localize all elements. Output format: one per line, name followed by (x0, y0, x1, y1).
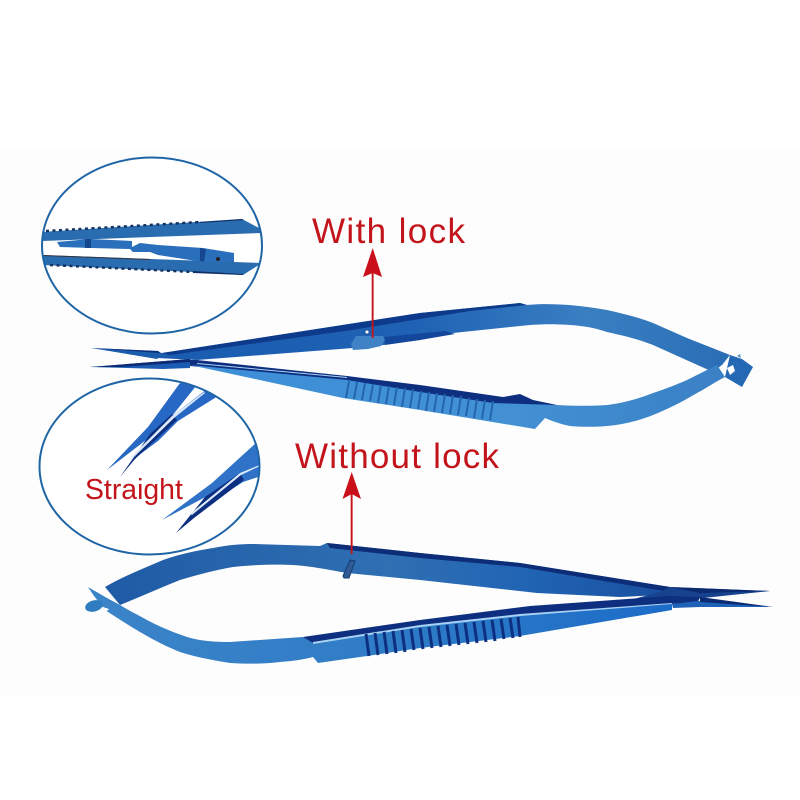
upper teeth (46, 222, 200, 231)
lower arm (88, 587, 672, 664)
lower jaw (672, 601, 773, 608)
detail circle: lock close-up (41, 157, 263, 334)
end knob (84, 598, 104, 614)
upper bar (42, 219, 262, 241)
lock pin (343, 560, 355, 578)
upper jaw (91, 348, 163, 359)
upper arm (157, 303, 730, 372)
background band (0, 148, 800, 696)
tip pair 2 (162, 442, 264, 520)
upper arm dark edge (327, 543, 670, 591)
upper arm dark edge (162, 303, 527, 355)
arrow: with lock (363, 248, 382, 338)
upper arm (105, 543, 670, 605)
lower teeth (50, 265, 193, 272)
lower arm (190, 365, 725, 429)
arrow: without lock (342, 472, 361, 554)
lower arm dark band (190, 360, 557, 412)
label: Without lock: Without lock (295, 437, 500, 476)
end tab (725, 355, 753, 387)
grip ridges (346, 381, 493, 420)
highlight line (313, 603, 672, 644)
instrument: with lock (90, 303, 753, 429)
label: With lock: With lock (312, 212, 466, 251)
detail circle: straight tips (39, 378, 264, 555)
tip pair 1 (107, 383, 218, 470)
upper arm inner shade (384, 331, 455, 345)
instrument: without lock (84, 543, 773, 664)
lock plate (351, 336, 385, 350)
lower jaw (90, 359, 190, 369)
ring (40, 378, 260, 554)
lower bar (42, 255, 262, 275)
lower arm dark band (303, 596, 700, 645)
light highlight (197, 363, 347, 378)
lock mechanism (57, 239, 234, 262)
centre jaw (630, 587, 770, 600)
grip ridges (366, 617, 520, 656)
ring (42, 158, 262, 334)
label: Straight: Straight (85, 474, 183, 506)
